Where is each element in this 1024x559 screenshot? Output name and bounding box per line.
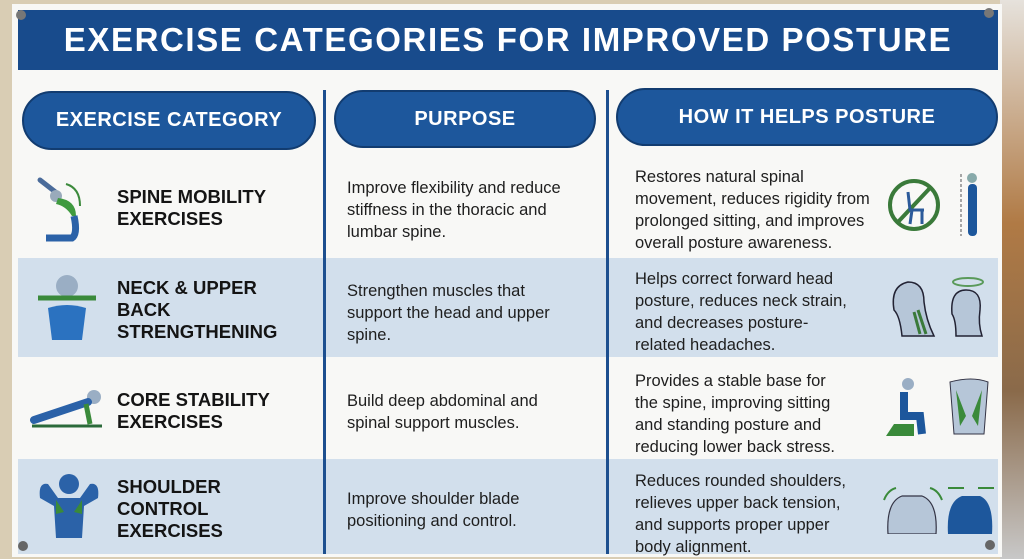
- row1 purpose: [347, 179, 561, 241]
- row1 how: Restores natural spinal: [635, 168, 804, 186]
- row3 category: CORE STABILITY: [117, 389, 270, 410]
- header: exercise category: EXERCISE CATEGORY: [56, 109, 282, 131]
- row3 how: Provides a stable base for: [635, 372, 826, 390]
- row4 how: and supports proper upper: [635, 516, 829, 534]
- header: purpose: PURPOSE: [414, 108, 516, 130]
- row1 icon: spine mobility: [38, 178, 81, 242]
- wall right: [1000, 0, 1024, 559]
- row1 icons: [888, 173, 977, 236]
- row2 how: [635, 270, 847, 354]
- row4 category: EXERCISES: [117, 520, 223, 541]
- row4 icons: [883, 487, 994, 534]
- row2 how: Helps correct forward head: [635, 270, 833, 288]
- row1 how: overall posture awareness.: [635, 234, 832, 252]
- row3 how: [635, 372, 835, 456]
- row1 how: [635, 168, 870, 252]
- row4 purpose: [347, 490, 519, 530]
- row2 purpose: spine.: [347, 326, 391, 344]
- row4 purpose: positioning and control.: [347, 512, 517, 530]
- header: how it helps: HOW IT HELPS POSTURE: [679, 106, 935, 128]
- row1 category: [117, 186, 266, 229]
- row3 how: the spine, improving sitting: [635, 394, 830, 412]
- row4 category: SHOULDER: [117, 476, 221, 497]
- row3 purpose: [347, 392, 538, 432]
- row4 category: [117, 476, 223, 541]
- title: [18, 10, 998, 70]
- row4 how: relieves upper back tension,: [635, 494, 840, 512]
- row2 how: posture, reduces neck strain,: [635, 292, 847, 310]
- row3 icon: [30, 390, 102, 428]
- pins: [16, 10, 26, 20]
- row4 icon: [40, 474, 98, 538]
- row2 purpose: [347, 282, 550, 344]
- row3 how: and standing posture and: [635, 416, 821, 434]
- row2 category: BACK: [117, 299, 170, 320]
- row1 purpose: lumbar spine.: [347, 223, 446, 241]
- column dividers: [323, 90, 326, 554]
- row3 how: reducing lower back stress.: [635, 438, 835, 456]
- row2 category: STRENGTHENING: [117, 321, 277, 342]
- row2 purpose: Strengthen muscles that: [347, 282, 525, 300]
- row1 purpose: stiffness in the thoracic and: [347, 201, 547, 219]
- header: how it helps: [616, 88, 998, 146]
- row3 icons: [886, 378, 988, 436]
- row3 purpose: Build deep abdominal and: [347, 392, 538, 410]
- row4 category: CONTROL: [117, 498, 208, 519]
- row2 icon: [38, 275, 96, 340]
- row1 how: prolonged sitting, and improves: [635, 212, 864, 230]
- row2 purpose: support the head and upper: [347, 304, 550, 322]
- row4 how: body alignment.: [635, 538, 752, 556]
- row backgrounds: [18, 258, 998, 357]
- header: purpose: [334, 90, 596, 148]
- row3 category: EXERCISES: [117, 411, 223, 432]
- row1 category: EXERCISES: [117, 208, 223, 229]
- row1 how: movement, reduces rigidity from: [635, 190, 870, 208]
- row3 purpose: spinal support muscles.: [347, 414, 519, 432]
- title: EXERCISE CATEGORIES FOR IMPROVED POSTURE: [64, 21, 952, 58]
- row4 how: [635, 472, 846, 556]
- row2 how: related headaches.: [635, 336, 775, 354]
- row2 category: NECK & UPPER: [117, 277, 257, 298]
- row1 category: SPINE MOBILITY: [117, 186, 266, 207]
- row1 purpose: Improve flexibility and reduce: [347, 179, 561, 197]
- header: exercise category: [22, 91, 316, 150]
- row2 category: [117, 277, 277, 342]
- row2 icons: [892, 277, 984, 337]
- row2 how: and decreases posture-: [635, 314, 808, 332]
- row3 category: [117, 389, 270, 432]
- row4 purpose: Improve shoulder blade: [347, 490, 519, 508]
- row4 how: Reduces rounded shoulders,: [635, 472, 846, 490]
